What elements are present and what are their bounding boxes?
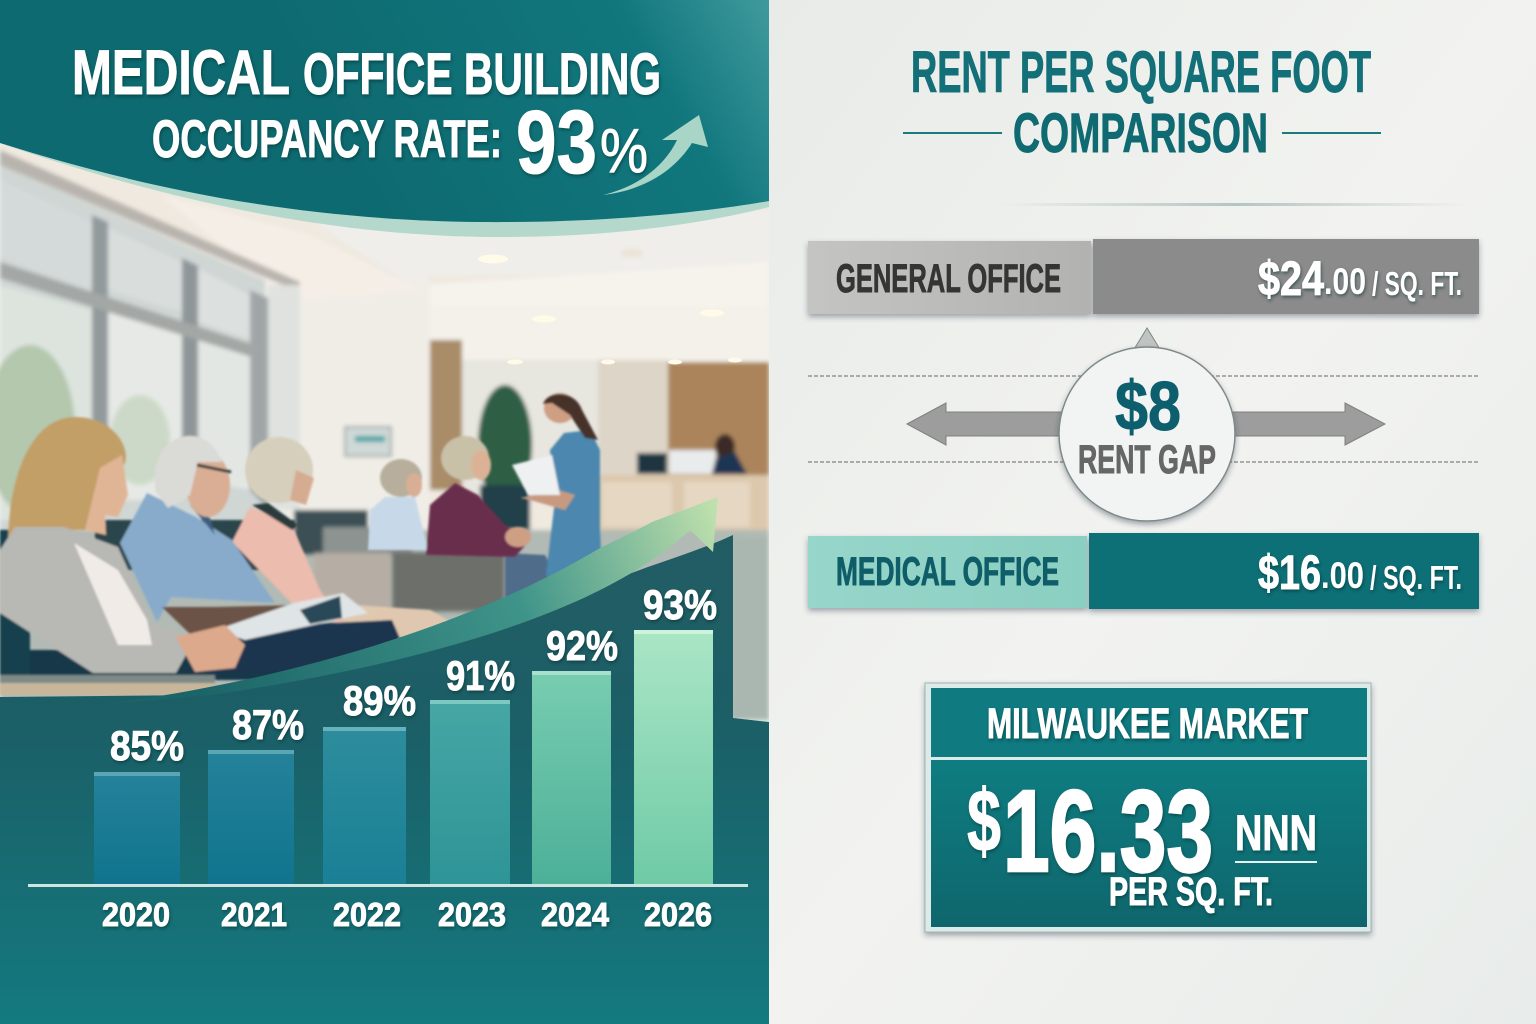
general office rent value: .00 xyxy=(1324,261,1366,302)
bar 2021: 87% xyxy=(232,701,304,748)
general office rent value: / SQ. FT. xyxy=(1372,265,1462,302)
double-headed arrow xyxy=(907,403,1385,445)
bar 2022: 89% xyxy=(343,677,416,724)
heading: line two: COMPARISON xyxy=(1013,101,1268,164)
bar 2026: 2026 xyxy=(644,896,712,933)
market rent value: 16.33 xyxy=(1003,766,1213,896)
bar 2024: 92% xyxy=(546,622,618,669)
bar 2021: 2021 xyxy=(221,896,287,933)
title: line one: MEDICAL xyxy=(72,38,290,108)
NNN label: NNN xyxy=(1235,805,1317,861)
general office value box xyxy=(1093,239,1479,314)
headline value: 93 xyxy=(516,93,597,193)
per square foot label: PER SQ. FT. xyxy=(1109,870,1273,914)
badge circle xyxy=(1059,347,1235,521)
title: line two: OCCUPANCY RATE: xyxy=(152,110,502,169)
title: line one continued: OFFICE BUILDING xyxy=(303,42,661,107)
bar chart xyxy=(28,581,748,933)
market rent dollar sign: $ xyxy=(967,771,1001,870)
bar 2023: 91% xyxy=(446,652,515,699)
medical office label box xyxy=(808,536,1087,608)
callout heading: MILWAUKEE MARKET xyxy=(987,700,1308,748)
bar 2024: 2024 xyxy=(541,896,610,933)
bar 2024 xyxy=(532,622,618,933)
bar 2020 xyxy=(94,722,184,933)
row: medical office xyxy=(808,533,1479,609)
pointer triangle xyxy=(1133,328,1161,351)
icon: upward arrow xyxy=(603,115,708,195)
header band accent curve xyxy=(0,140,769,237)
right heading xyxy=(903,40,1470,206)
gap label: RENT GAP xyxy=(1078,438,1216,482)
callout body xyxy=(931,760,1367,927)
bar 2020: 85% xyxy=(110,722,184,769)
medical office rent value: .00 xyxy=(1321,555,1364,596)
bar 2022 xyxy=(323,677,416,933)
general office label: GENERAL OFFICE xyxy=(836,257,1061,301)
row: general office xyxy=(808,239,1479,314)
people in foreground: woman with cardigan, older man, older woman xyxy=(0,417,457,695)
callout header bar xyxy=(931,688,1367,757)
medical office rent value xyxy=(1258,547,1462,600)
header band xyxy=(0,0,769,222)
chart baseline xyxy=(28,884,748,887)
bar 2020: 2020 xyxy=(102,896,170,933)
general office label box xyxy=(808,241,1091,314)
medical office value box xyxy=(1089,533,1479,609)
general office rent value: $24 xyxy=(1258,253,1324,306)
gap dashed guides xyxy=(808,376,1479,462)
left panel xyxy=(0,0,769,1024)
right panel background xyxy=(769,0,1536,1024)
growth arrow xyxy=(163,497,718,696)
bar 2026: 93% xyxy=(643,581,717,628)
bar 2022: 2022 xyxy=(333,896,401,933)
title xyxy=(72,38,661,193)
bar 2026 xyxy=(634,581,717,933)
photo background: room xyxy=(0,140,769,720)
people in background: seated patients and nurse xyxy=(366,392,602,597)
medical office rent value: $16 xyxy=(1258,547,1321,600)
callout frame xyxy=(925,683,1371,932)
headline percent sign: % xyxy=(600,117,648,186)
callout: Milwaukee market xyxy=(925,683,1371,932)
medical office label: MEDICAL OFFICE xyxy=(836,550,1059,594)
ceiling lights xyxy=(478,254,742,364)
lobby photo scene xyxy=(0,140,769,720)
bar 2023 xyxy=(430,652,515,933)
lower chart panel xyxy=(0,535,769,1024)
bar 2021 xyxy=(208,701,304,933)
medical office rent value: / SQ. FT. xyxy=(1370,559,1462,596)
rent gap badge xyxy=(1059,347,1235,521)
gap value: $8 xyxy=(1115,367,1181,445)
general office rent value xyxy=(1258,253,1462,306)
bar 2023: 2023 xyxy=(438,896,506,933)
